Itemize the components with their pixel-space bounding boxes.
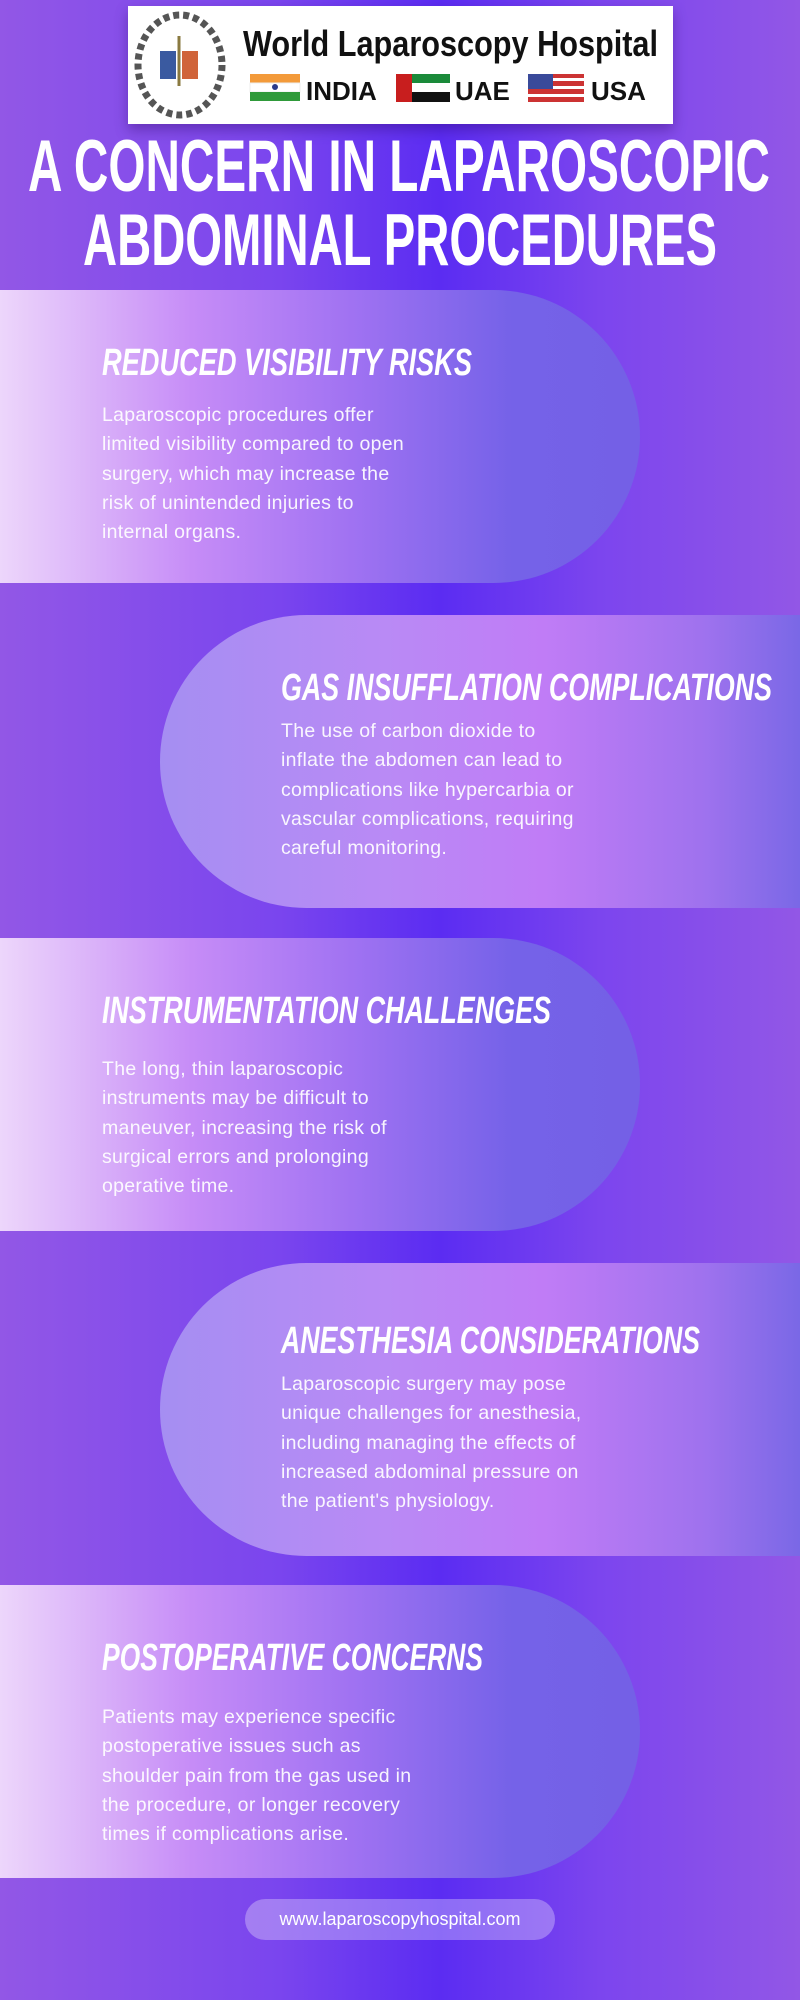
text block: operative time. [102, 1175, 234, 1197]
text block: Laparoscopic procedures offer [102, 404, 374, 426]
text block: surgical errors and prolonging [102, 1146, 369, 1168]
text block: inflate the abdomen can lead to [281, 749, 562, 771]
text block: The use of carbon dioxide to [281, 720, 535, 742]
flags and countries: UAE [455, 76, 510, 106]
text block: surgery, which may increase the [102, 463, 389, 485]
text block: including managing the effects of [281, 1432, 576, 1454]
text block: the patient's physiology. [281, 1490, 495, 1512]
flags and countries [250, 74, 646, 106]
text block: vascular complications, requiring [281, 808, 574, 830]
logo banner [128, 6, 673, 124]
text block: Patients may experience specific [102, 1706, 396, 1728]
text block: maneuver, increasing the risk of [102, 1117, 387, 1139]
text block: shoulder pain from the gas used in [102, 1765, 411, 1787]
text block: Laparoscopic surgery may pose [281, 1373, 566, 1395]
text block [281, 1373, 581, 1512]
text block: risk of unintended injuries to [102, 492, 354, 514]
flags and countries: USA [591, 76, 646, 106]
panel: reduced visibility risks [0, 290, 640, 583]
text block: careful monitoring. [281, 837, 447, 859]
title [28, 130, 770, 270]
text block: internal organs. [102, 521, 241, 543]
panel: gas insufflation complications [160, 615, 800, 908]
text block: limited visibility compared to open [102, 433, 404, 455]
text block: times if complications arise. [102, 1823, 349, 1845]
text block: the procedure, or longer recovery [102, 1794, 400, 1816]
panel: anesthesia considerations [160, 1263, 800, 1556]
panel: instrumentation challenges [0, 938, 640, 1231]
text block: instruments may be difficult to [102, 1087, 369, 1109]
text block: The long, thin laparoscopic [102, 1058, 343, 1080]
text block [102, 1706, 411, 1845]
text block: postoperative issues such as [102, 1735, 361, 1757]
text block: unique challenges for anesthesia, [281, 1402, 581, 1424]
footer: website pill [245, 1899, 555, 1940]
text block [102, 1058, 387, 1197]
text block: increased abdominal pressure on [281, 1461, 579, 1483]
flags and countries: INDIA [306, 76, 377, 106]
icon: wreath emblem [138, 15, 222, 115]
panel: postoperative concerns [0, 1585, 640, 1878]
text block [281, 720, 574, 859]
text block [102, 404, 404, 543]
footer: website pill: www.laparoscopyhospital.com [279, 1909, 521, 1929]
text block: complications like hypercarbia or [281, 779, 574, 801]
